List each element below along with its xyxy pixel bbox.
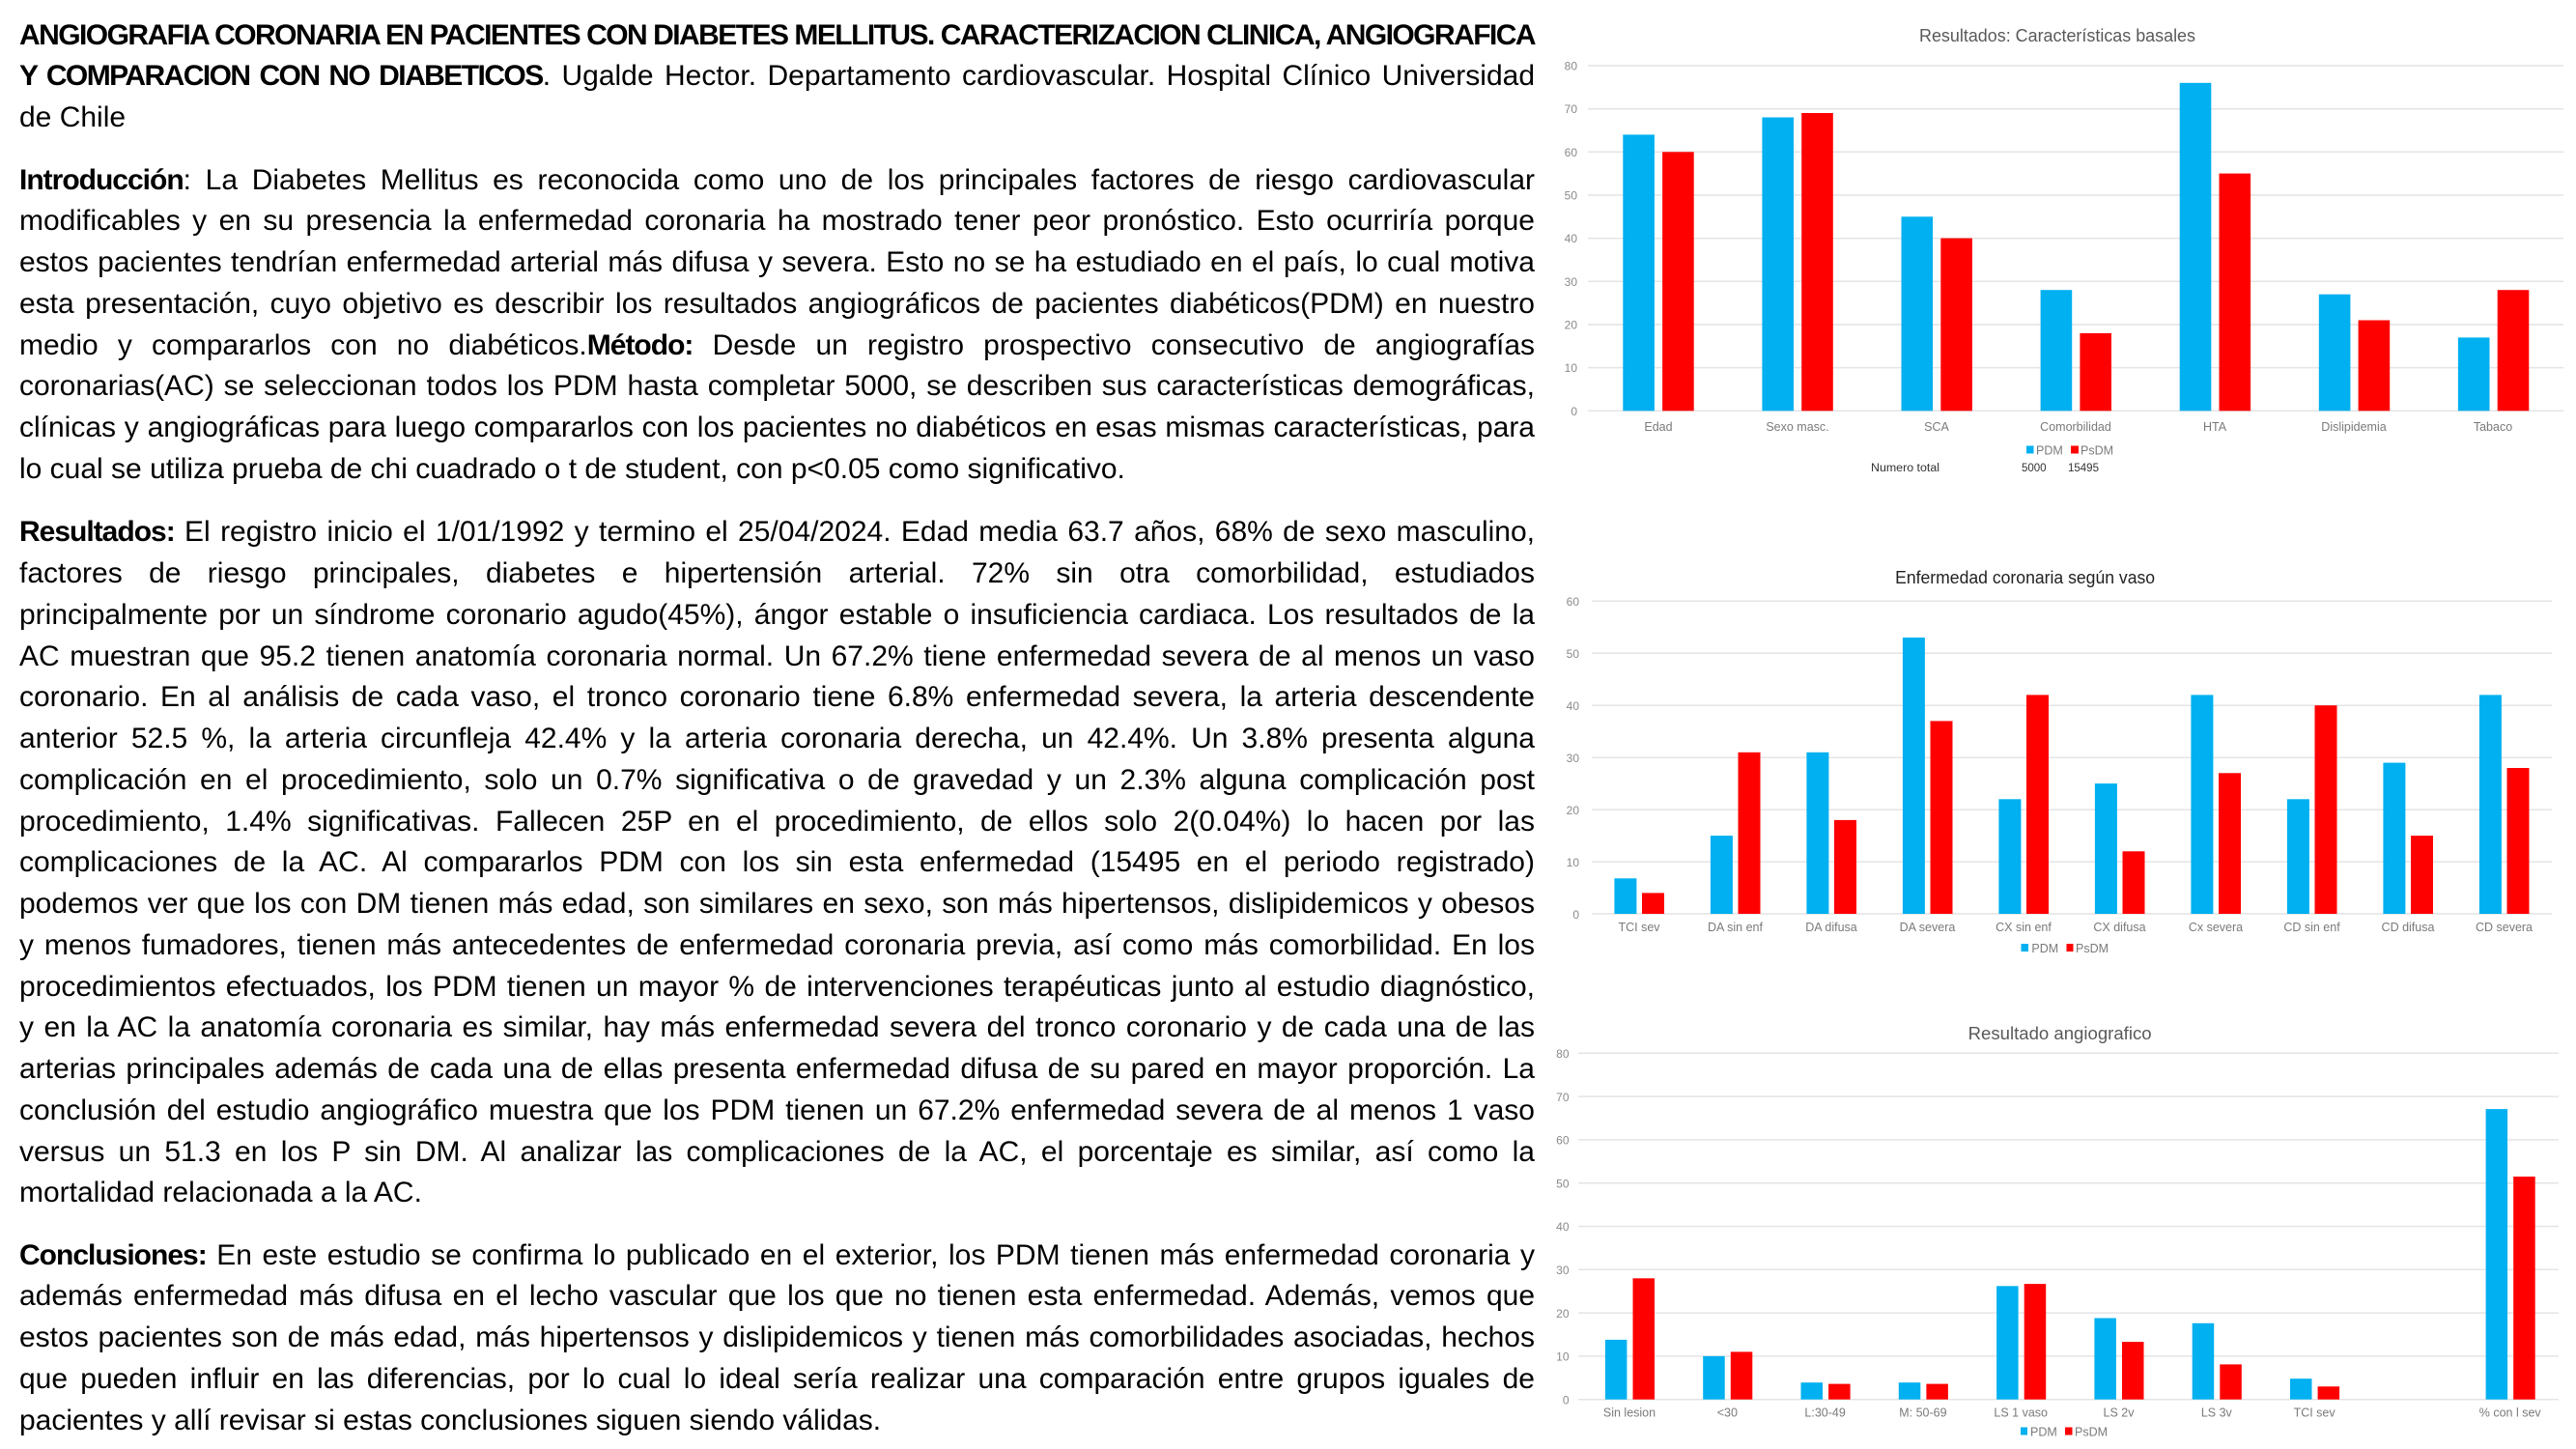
text block: resultados: procedimiento, 1.4% significativas. Fallecen 25P en el procedimiento, de ellos solo 2(0.04%) lo hacen por las [19,806,1535,838]
category labels: CD difusa [2382,921,2434,934]
y axis labels: 70 [1556,1091,1570,1104]
category labels: DA severa [1900,921,1955,934]
chart: Resultado angiográfico [1556,1024,2559,1439]
text block: resultados: y en la AC la anatomía coronaria es similar, hay más enfermedad severa del tronco coronario y de cada una de las [19,1011,1535,1043]
legend: PDM [2036,444,2063,458]
category labels: <30 [1717,1406,1738,1420]
category labels: LS 2v [2104,1406,2135,1420]
category labels: CX difusa [2093,921,2146,934]
category labels: TCI sev [1618,921,1660,934]
text block: resultados: podemos ver que los con DM tienen más edad, son similares en sexo, son más hipertensos, dislipidemicos y obesos [19,888,1535,920]
text block: resultados: coronario. En al análisis de cada vaso, el tronco coronario tiene 6.8% enfermedad severa, la arteria descendente [19,681,1535,713]
legend: PDM [2031,942,2058,955]
y axis labels: 50 [1567,647,1579,661]
total count row: 5000 [2022,463,2047,474]
title and authors: Y COMPARACION CON NO DIABETICOS. Ugalde Hector. Departamento cardiovascular. Hospital Clínico Universidad [19,60,1535,92]
category labels: Edad [1644,420,1673,434]
text block: resultados: AC muestran que 95.2 tienen anatomía coronaria normal. Un 67.2% tiene enfermedad severa de al menos un vaso [19,640,1535,672]
category labels: SCA [1924,420,1950,434]
legend: PsDM [2081,444,2113,458]
text block: resultados: principalmente por un síndrome coronario agudo(45%), ángor estable o insuficiencia cardiaca. Los resultados de la [19,599,1535,631]
chart title: Resultados: Características basales [1919,26,2195,45]
chart: Enfermedad coronaria según vaso [1567,568,2552,955]
y axis labels: 40 [1567,699,1579,713]
y axis labels: 50 [1565,189,1577,203]
y axis labels: 60 [1565,146,1577,159]
y axis labels: 0 [1572,908,1579,922]
text block: resultados: factores de riesgo principales, diabetes e hipertensión arterial. 72% sin otra comorbilidad, estudiados [19,557,1535,589]
text block: resultados: arterias principales además de cada una de ellas presenta enfermedad difusa de su pared en mayor proporción. La [19,1053,1535,1085]
y axis labels: 30 [1556,1264,1570,1277]
category labels: LS 1 vaso [1994,1406,2048,1420]
category labels: HTA [2203,420,2227,434]
title and authors [19,19,1536,133]
y axis labels: 60 [1567,595,1579,609]
legend [2026,444,2113,458]
text block: resultados: complicación en el procedimiento, solo un 0.7% significativa o de gravedad y un 2.3% alguna complicación post [19,764,1535,796]
title and authors: ANGIOGRAFIA CORONARIA EN PACIENTES CON DIABETES MELLITUS. CARACTERIZACION CLINICA, ANGIOGRAFICA [19,19,1535,50]
y axis labels [1567,595,1579,922]
category labels [1618,921,2533,934]
text block: introducción y método: estos pacientes tendrían enfermedad arterial más difusa y severa. Esto no se ha estudiado en el país, lo cual motiva [19,246,1535,278]
category labels [1603,1406,2541,1420]
y axis labels: 0 [1571,405,1577,418]
category labels: LS 3v [2201,1406,2233,1420]
y axis labels: 40 [1565,232,1577,245]
y axis labels: 70 [1565,102,1577,116]
category labels: Sexo masc. [1766,420,1829,434]
text block: introducción y método [19,164,1535,485]
text block: resultados: Resultados: El registro inicio el 1/01/1992 y termino el 25/04/2024. Edad media 63.7 años, 68% de sexo masculino, [19,516,1535,548]
category labels: Comorbilidad [2040,420,2111,434]
text block: introducción y método: coronarias(AC) se seleccionan todos los PDM hasta completar 5000, se describen sus características demográficas, [19,370,1535,402]
text block: resultados: anterior 52.5 %, la arteria circunfleja 42.4% y la arteria coronaria derecha, un 42.4%. Un 3.8% presenta alguna [19,723,1535,754]
PDM bars [1605,1109,2507,1400]
category labels: Sin lesion [1603,1406,1656,1420]
category labels: Cx severa [2189,921,2243,934]
PsDM bars [1662,113,2529,411]
y axis labels: 10 [1567,856,1579,869]
y axis labels: 30 [1565,275,1577,289]
text block: conclusiones: además enfermedad más difusa en el lecho vascular que los que no tienen esta enfermedad. Además, vemos que [19,1280,1535,1312]
y axis labels: 40 [1556,1220,1570,1234]
total count row: 15495 [2068,463,2099,474]
category labels: CX sin enf [1996,921,2052,934]
category labels: L:30-49 [1804,1406,1846,1420]
PsDM bars [1642,695,2529,914]
text block: resultados: versus un 51.3 en los P sin DM. Al analizar las complicaciones de la AC, el porcentaje es similar, así como la [19,1136,1535,1168]
text block: introducción y método: clínicas y angiográficas para luego compararlos con los pacientes no diabéticos en esas mismas características, para [19,412,1535,443]
y axis labels: 50 [1556,1177,1570,1190]
y axis labels: 0 [1563,1393,1570,1406]
category labels: Dislipidemia [2321,420,2387,434]
category labels: DA sin enf [1708,921,1764,934]
text block: conclusiones: que pueden influir en las diferencias, por lo cual lo ideal sería realizar una comparación entre grupos iguales de [19,1363,1535,1395]
category labels: Tabaco [2474,420,2512,434]
legend: PDM [2030,1426,2057,1439]
legend [2021,942,2109,955]
chart: Resultados, características basales [1565,26,2563,474]
text block: introducción y método: medio y compararlos con no diabéticos.Método: Desde un registro prospectivo consecutivo de angiografías [19,328,1535,361]
legend: PsDM [2076,942,2109,955]
total count row: Numero total [1871,463,1939,474]
y axis labels [1565,60,1577,418]
text block: resultados: procedimientos efectuados, los PDM tienen un mayor % de intervenciones terapéuticas junto al estudio diagnóstico, [19,971,1535,1003]
text block: resultados [19,516,1535,1208]
y axis labels: 20 [1567,804,1579,817]
y axis labels: 10 [1565,361,1577,375]
y axis labels: 20 [1565,319,1577,332]
legend [2021,1426,2108,1439]
PDM bars [1614,638,2502,914]
text block: introducción y método: lo cual se utiliza prueba de chi cuadrado o t de student, con p<0.05 como significativo. [19,453,1125,485]
category labels: TCI sev [2294,1406,2335,1420]
chart title: Resultado angiografico [1968,1024,2152,1043]
y axis labels: 80 [1565,60,1577,73]
PsDM bars [1632,1177,2535,1400]
text block: resultados: complicaciones de la AC. Al compararlos PDM con los sin esta enfermedad (15495 en el periodo registrado) [19,846,1535,878]
text block: conclusiones: pacientes y allí revisar si estas conclusiones siguen siendo válidas. [19,1405,881,1435]
y axis labels: 20 [1556,1307,1570,1321]
y axis labels [1556,1047,1570,1406]
text block: introducción y método: Introducción: La Diabetes Mellitus es reconocida como uno de los principales factores de riesgo cardiovascular [19,164,1535,195]
y axis labels: 30 [1567,752,1579,765]
text block: introducción y método: esta presentación, cuyo objetivo es describir los resultados angiográficos de pacientes diabéticos(PDM) en nuestro [19,288,1535,320]
category labels: M: 50-69 [1899,1406,1947,1420]
y axis labels: 60 [1556,1134,1570,1148]
category labels: CD severa [2476,921,2533,934]
y axis labels: 80 [1556,1047,1570,1061]
chart title: Enfermedad coronaria según vaso [1895,568,2155,587]
category labels [1644,420,2512,434]
title and authors: de Chile [19,101,126,133]
legend: PsDM [2075,1426,2108,1439]
text block: resultados: mortalidad relacionada a la AC. [19,1177,422,1208]
y axis labels: 10 [1556,1350,1570,1364]
PDM bars [1623,83,2490,411]
text block: conclusiones [19,1238,1535,1435]
category labels: CD sin enf [2283,921,2340,934]
text block: introducción y método: modificables y en su presencia la enfermedad coronaria ha mostrado tener peor pronóstico. Esto ocurriría porque [19,205,1535,237]
text block: resultados: conclusión del estudio angiográfico muestra que los PDM tienen un 67.2% enfermedad severa de al menos 1 vaso [19,1094,1535,1126]
total count row [1871,463,2099,474]
category labels: DA difusa [1805,921,1857,934]
text block: conclusiones: estos pacientes son de más edad, más hipertensos y dislipidemicos y tienen más comorbilidades asociadas, hechos [19,1321,1535,1353]
text block: resultados: y menos fumadores, tienen más antecedentes de enfermedad coronaria previa, así como más comorbilidad. En los [19,929,1535,961]
text block: conclusiones: Conclusiones: En este estudio se confirma lo publicado en el exterior, los PDM tienen más enfermedad coronaria y [19,1238,1535,1271]
category labels: % con l sev [2479,1406,2541,1420]
